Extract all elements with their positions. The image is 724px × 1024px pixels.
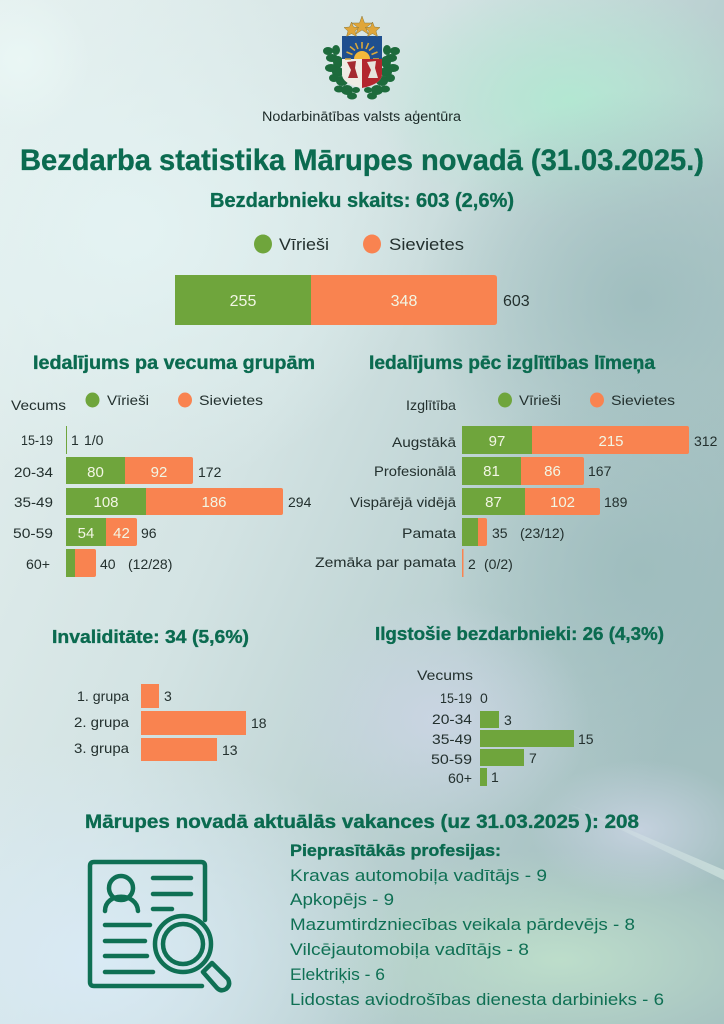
- icon: stars: [344, 16, 380, 36]
- chart: education: 86: [544, 463, 561, 480]
- chart: education: (0/2): [484, 556, 513, 572]
- icon: shield: [342, 36, 382, 88]
- heading: vacancies: Mārupes novadā aktuālās vakances (uz 31.03.2025 ): 208: [85, 812, 639, 833]
- chart: age groups: 108: [93, 494, 119, 511]
- text: most demanded professions: Apkopējs - 9: [290, 890, 394, 909]
- chart: long-term unemployed: [417, 667, 594, 786]
- chart: total bar: 348: [391, 293, 417, 310]
- chart: education: 215: [598, 433, 624, 450]
- chart: long-term unemployed: 60+: [448, 770, 472, 786]
- chart: education: Pamata: [402, 525, 456, 541]
- chart: long-term unemployed: 35-49: [432, 731, 472, 747]
- chart: age groups: 80: [87, 464, 104, 481]
- logo: Latvian coat of arms: [323, 16, 400, 100]
- chart: education: Augstākā: [392, 434, 456, 450]
- chart: total bar: 603: [503, 293, 530, 310]
- chart: age groups: 92: [151, 464, 167, 481]
- chart: total bar: 255: [230, 293, 256, 310]
- chart: age groups: Vecums: [11, 397, 66, 413]
- chart: age groups: 35-49: [14, 494, 53, 510]
- chart: long-term unemployed: 15: [578, 731, 594, 747]
- chart: long-term unemployed: 50-59: [431, 751, 472, 767]
- heading: age groups: Iedalījums pa vecuma grupām: [33, 353, 315, 374]
- chart: age groups: 15-19: [21, 432, 53, 448]
- chart: education: 312: [694, 433, 718, 449]
- chart: disability: 13: [222, 742, 238, 758]
- chart: age groups: Vīrieši: [107, 392, 149, 408]
- legend: main: Sievietes: [389, 235, 464, 254]
- chart: education: Profesionālā: [374, 463, 456, 479]
- text: most demanded professions: Kravas automobiļa vadītājs - 9: [290, 866, 547, 885]
- chart: long-term unemployed: 20-34: [432, 711, 472, 727]
- chart: education: 87: [485, 494, 502, 511]
- text: most demanded professions: Pieprasītākās profesijas:: [290, 842, 501, 860]
- chart: education: Vīrieši: [519, 392, 561, 408]
- chart: age groups: 42: [113, 525, 130, 542]
- chart: age groups: 20-34: [14, 464, 53, 480]
- chart: age groups: (12/28): [128, 556, 172, 572]
- chart: education: Izglītība: [406, 397, 456, 413]
- legend: main: Vīrieši: [279, 235, 329, 254]
- icon: document with magnifier: [90, 862, 229, 990]
- chart: education: 102: [550, 494, 575, 511]
- legend: main: [254, 234, 464, 254]
- icon: oak wreath: [323, 45, 400, 100]
- chart: education: Vispārējā vidējā: [350, 494, 456, 510]
- chart: age groups: 60+: [26, 556, 50, 572]
- chart: age groups: 54: [78, 525, 94, 542]
- chart: education: [315, 392, 718, 577]
- chart: education: Zemāka par pamata: [315, 554, 456, 570]
- chart: age groups: Sievietes: [199, 392, 263, 408]
- chart: disability: 2. grupa: [74, 714, 129, 730]
- chart: long-term unemployed: 7: [529, 750, 537, 766]
- chart: disability: 18: [251, 715, 267, 731]
- chart: disability: [74, 684, 267, 761]
- chart: age groups: 294: [288, 494, 312, 510]
- chart: disability: 3: [164, 688, 172, 704]
- heading: education: Iedalījums pēc izglītības līmeņa: [369, 353, 655, 374]
- chart: education: 189: [604, 494, 628, 510]
- chart: total bar: [175, 275, 530, 325]
- chart: education: Sievietes: [611, 392, 675, 408]
- agency name: Nodarbinātības valsts aģentūra: [262, 109, 462, 124]
- heading: long-term unemployed: Ilgstošie bezdarbnieki: 26 (4,3%): [375, 624, 664, 644]
- text: most demanded professions: Elektriķis - 6: [290, 965, 385, 984]
- chart: age groups: 50-59: [13, 525, 53, 541]
- chart: age groups: 1/0: [84, 432, 104, 448]
- chart: long-term unemployed: Vecums: [417, 667, 473, 683]
- chart: long-term unemployed: 0: [480, 690, 488, 706]
- chart: age groups: 172: [198, 464, 222, 480]
- chart: age groups: 186: [201, 494, 227, 511]
- text: most demanded professions: [290, 842, 664, 1009]
- chart: long-term unemployed: 1: [491, 769, 499, 785]
- chart: education: 2: [468, 556, 476, 572]
- chart: education: 35: [492, 525, 508, 541]
- chart: disability: 1. grupa: [77, 688, 129, 704]
- chart: long-term unemployed: 3: [504, 712, 512, 728]
- chart: age groups: 40: [100, 556, 116, 572]
- title: Bezdarba statistika Mārupes novadā (31.03.2025.): [20, 144, 704, 177]
- chart: education: 167: [588, 463, 612, 479]
- chart: disability: 3. grupa: [74, 740, 129, 756]
- chart: long-term unemployed: 15-19: [440, 690, 472, 706]
- chart: education: (23/12): [520, 525, 564, 541]
- text: most demanded professions: Vilcējautomobiļa vadītājs - 8: [290, 940, 529, 959]
- chart: age groups: [11, 392, 312, 577]
- text: most demanded professions: Mazumtirdzniecības veikala pārdevējs - 8: [290, 915, 635, 934]
- chart: education: 81: [483, 463, 500, 480]
- chart: education: 97: [489, 433, 505, 450]
- text: most demanded professions: Lidostas aviodrošības dienesta darbinieks - 6: [290, 990, 664, 1009]
- subtitle: total unemployed: Bezdarbnieku skaits: 603 (2,6%): [210, 190, 514, 212]
- chart: age groups: 1: [71, 432, 79, 448]
- chart: age groups: 96: [141, 525, 157, 541]
- heading: disability: Invaliditāte: 34 (5,6%): [52, 627, 249, 647]
